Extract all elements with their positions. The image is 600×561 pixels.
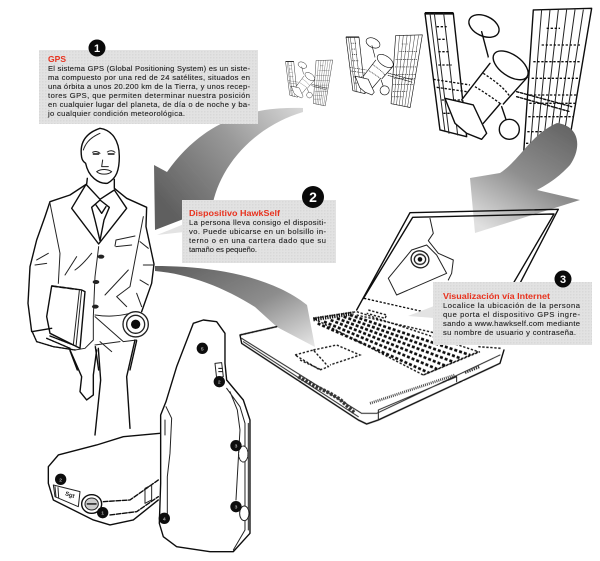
suit jacket <box>28 178 154 352</box>
text block: device description: vo. Puede ubicarse en un bolsillo in- <box>189 227 326 236</box>
number badge 2: 2 <box>309 189 317 205</box>
text block: GPS description: en cualquier lugar del planeta, de día o de noche y ba- <box>48 100 250 109</box>
arrow: satellites to laptop <box>470 123 580 233</box>
text block: internet description: su nombre de usuario y contraseña. <box>443 328 576 337</box>
fade wedge beside box 2 <box>157 224 184 235</box>
part markers: 2 <box>59 477 62 483</box>
part markers: 4 <box>163 516 166 522</box>
number badge 1: 1 <box>94 43 100 55</box>
device: flat view <box>48 433 160 525</box>
arrow: satellites to person <box>154 108 303 230</box>
number badge 3: 3 <box>560 274 566 286</box>
text block: device description: terno o en una cartera dado que su <box>189 236 326 245</box>
number badge 2 <box>302 186 324 208</box>
part markers: 1 <box>101 511 104 517</box>
arrow: person to laptop <box>155 266 315 347</box>
number badge 3 <box>554 270 572 288</box>
panel: GPS <box>39 50 258 124</box>
laptop <box>240 209 558 424</box>
text block: GPS description: El sistema GPS (Global Positioning System) es un siste- <box>48 64 250 73</box>
part markers: 2 <box>218 380 221 386</box>
heading: Visualización vía Internet: Visualización vía Internet <box>443 291 550 301</box>
part markers: 3 <box>235 444 238 450</box>
person in suit <box>28 128 154 370</box>
panel: Dispositivo HawkSelf <box>182 200 336 263</box>
panel: Visualización vía Internet <box>433 282 592 345</box>
head <box>81 128 119 183</box>
text block: GPS description: tores GPS, que permiten determinar nuestra posición <box>48 91 250 100</box>
part markers: 5 <box>201 346 204 352</box>
laptop base <box>240 327 504 424</box>
heading: Dispositivo HawkSelf: Dispositivo HawkSelf <box>189 208 280 218</box>
laptop screen <box>357 209 558 312</box>
keyboard <box>313 310 502 375</box>
heading: GPS: GPS <box>48 54 66 64</box>
text block: device description: tamaño es pequeño. <box>189 245 257 254</box>
text block: GPS description: una órbita a unos 20.200 km de la Tierra, y unos recep- <box>48 82 250 91</box>
legs, lower part <box>70 340 135 435</box>
text block: internet description: Localice la ubicación de la persona <box>443 301 581 310</box>
legs <box>70 341 137 370</box>
number badge 1 <box>88 40 106 56</box>
satellite: medium <box>346 35 422 108</box>
satellite: small <box>286 60 333 106</box>
folder under arm <box>33 286 85 350</box>
part markers: 3 <box>235 505 238 511</box>
text block: GPS description: jo cualquier condición meteorológica. <box>47 109 185 118</box>
text block: GPS description <box>47 64 250 118</box>
part markers <box>55 343 242 524</box>
satellite: large <box>425 8 592 167</box>
text block: internet description <box>443 301 581 337</box>
text block: device description <box>189 218 326 254</box>
text block: internet description: que porta el dispositivo GPS ingre- <box>443 310 580 319</box>
text block: internet description: sando a www.hawkself.com mediante <box>443 319 580 328</box>
device brand mark: Sgt <box>64 491 75 500</box>
device: side view <box>55 320 250 552</box>
target: device location <box>123 312 148 337</box>
text block: device description: La persona lleva consigo el dispositi- <box>189 218 326 227</box>
text block: GPS description: ma compuesto por una red de 24 satélites, situados en <box>48 73 250 82</box>
fade wedge beside box 3 <box>408 306 434 318</box>
